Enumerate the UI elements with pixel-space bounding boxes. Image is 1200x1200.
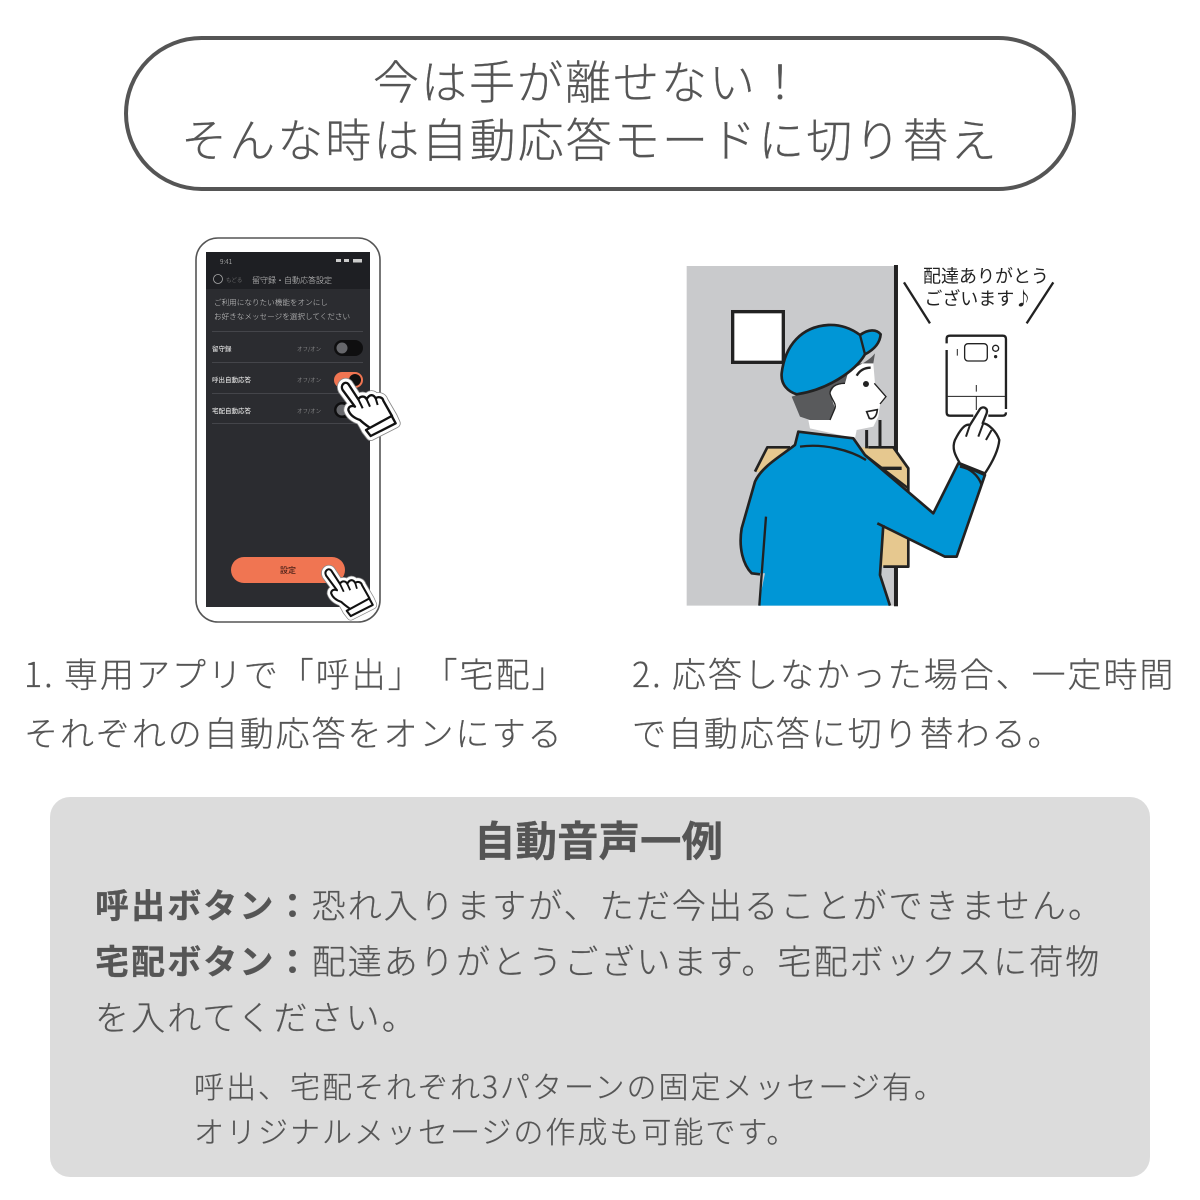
hand pressing button bbox=[954, 407, 999, 473]
speech lines bbox=[904, 282, 1053, 323]
step 2 text: 2. 応答しなかった場合、一定時間 bbox=[632, 648, 1175, 697]
note: 呼出、宅配それぞれ3パターンの固定メッセージ有。 bbox=[194, 1063, 946, 1107]
panel heading: 自動音声一例 bbox=[474, 808, 723, 868]
cap bbox=[782, 325, 881, 394]
settings button bbox=[231, 557, 345, 583]
step 1 text: 1. 専用アプリで「呼出」「宅配」 bbox=[24, 648, 567, 697]
phone screen: オフ/オン bbox=[297, 345, 321, 353]
speech text: 配達ありがとう bbox=[923, 262, 1049, 288]
phone screen: 9:41 bbox=[220, 256, 233, 266]
icon: pointing hand on button bbox=[325, 569, 373, 616]
intercom bbox=[947, 336, 1006, 416]
phone body bbox=[196, 238, 396, 622]
title pill bbox=[124, 36, 1076, 191]
wall bbox=[687, 266, 896, 606]
phone and delivery illustrations bbox=[195, 237, 1054, 623]
panel: voice examples bbox=[50, 797, 1150, 1177]
parcel box bbox=[755, 447, 908, 567]
title line 1: 今は手が離せない！ bbox=[373, 47, 805, 113]
step 2 text: で自動応答に切り替わる。 bbox=[632, 707, 1063, 756]
example messages bbox=[95, 879, 1104, 1040]
phone screen: オフ/オン bbox=[297, 407, 321, 415]
title line 2: そんな時は自動応答モードに切り替え bbox=[181, 105, 999, 171]
phone screen: 呼出自動応答 bbox=[212, 374, 252, 384]
example messages: 呼出ボタン：恐れ入りますが、ただ今出ることができません。 bbox=[95, 879, 1104, 928]
phone screen bbox=[206, 252, 370, 607]
phone screen: ご利用になりたい機能をオンにし bbox=[214, 297, 328, 308]
note bbox=[194, 1063, 946, 1152]
phone screen: オフ/オン bbox=[297, 376, 321, 384]
door edge bbox=[894, 265, 898, 606]
speech text: ございます♪ bbox=[924, 285, 1032, 311]
icon: pointing hand on toggle bbox=[342, 383, 396, 436]
speech text bbox=[923, 262, 1049, 311]
step 1 text: それぞれの自動応答をオンにする bbox=[24, 707, 564, 756]
phone screen: 留守録 bbox=[212, 343, 232, 353]
step 1 text bbox=[24, 648, 567, 756]
example messages: 宅配ボタン：配達ありがとうございます。宅配ボックスに荷物 bbox=[95, 935, 1101, 984]
neck and face bbox=[792, 353, 886, 448]
jacket bbox=[741, 432, 985, 606]
wall frame bbox=[733, 312, 783, 362]
phone screen: 留守録・自動応答設定 bbox=[252, 275, 332, 286]
phone screen: 宅配自動応答 bbox=[212, 405, 252, 415]
delivery illustration bbox=[687, 262, 1053, 606]
note: オリジナルメッセージの作成も可能です。 bbox=[194, 1108, 798, 1152]
example messages: を入れてください。 bbox=[95, 991, 418, 1040]
step 2 text bbox=[632, 648, 1175, 756]
phone screen: もどる bbox=[226, 276, 242, 284]
phone screen: お好きなメッセージを選択してください bbox=[214, 311, 350, 322]
settings button: 設定 bbox=[280, 565, 296, 576]
